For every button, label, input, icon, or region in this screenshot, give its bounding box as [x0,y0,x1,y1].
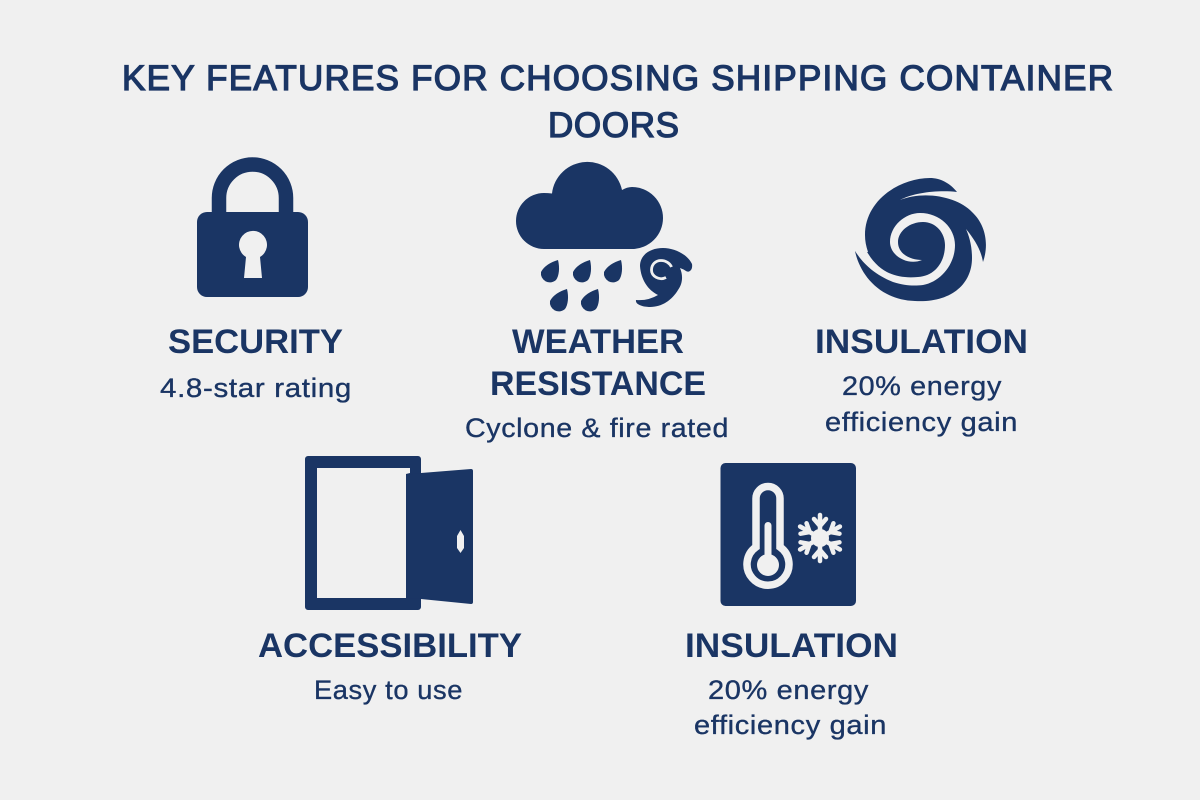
text: energy gain: efficiency gain [694,710,887,740]
heading: insulation: INSULATION [685,627,898,665]
icon: rain cloud with cyclone [516,162,692,311]
heading: resistance: RESISTANCE [490,365,706,403]
icon: thermometer and snowflake [720,463,856,606]
heading: accessibility: ACCESSIBILITY [258,627,522,665]
text: rating detail: Cyclone & fire rated [465,413,729,443]
icon: padlock [197,164,308,297]
panel: insulation top [815,178,1028,437]
text: energy gain: 20% energy [842,371,1002,401]
text: energy gain: 20% energy [708,675,869,705]
text: energy gain [825,371,1018,437]
icon: cyclone [855,178,986,301]
panel: security [160,164,352,403]
text: rating: 4.8-star rating [160,373,352,403]
title: KEY FEATURES FOR CHOOSING SHIPPING CONTAINER [122,59,1113,98]
heading: security: SECURITY [168,323,343,361]
text: energy gain [694,675,887,740]
heading: insulation: INSULATION [815,323,1028,361]
title: DOORS [548,106,679,145]
icon: open door [305,456,473,610]
text: easy to use: Easy to use [314,675,463,705]
heading: weather: WEATHER [512,323,684,361]
text: energy gain: efficiency gain [825,407,1018,437]
panel: insulation bottom [685,463,898,740]
panel: weather resistance [465,162,729,443]
panel: accessibility [258,456,522,705]
title [122,59,1113,145]
